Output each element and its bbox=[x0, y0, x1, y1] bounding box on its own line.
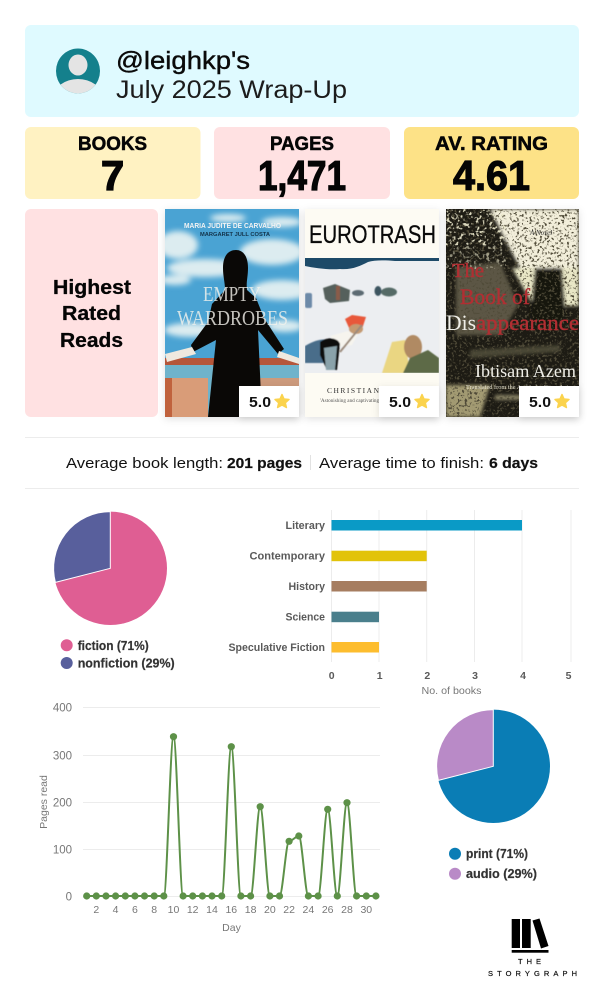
legend: fiction: fiction (71%) bbox=[78, 639, 149, 653]
stat line: average book length: Average book length: bbox=[66, 455, 223, 472]
line chart: pages read per day: 200 bbox=[53, 798, 72, 810]
line chart: pages read per day: 20 bbox=[264, 904, 276, 916]
line chart: pages read per day: 6 bbox=[132, 904, 138, 916]
line chart: pages read per day: 14 bbox=[206, 904, 218, 916]
book cover: The Book of Disappearance bbox=[446, 209, 579, 417]
stat line: average time to finish: 6 days bbox=[489, 455, 538, 472]
rating badge bbox=[519, 386, 579, 417]
logo: The StoryGraph bbox=[488, 918, 577, 978]
book cover: Empty Wardrobes: WARDROBES bbox=[177, 306, 288, 330]
pie chart: fiction vs nonfiction bbox=[54, 512, 175, 670]
line chart: pages read per day: 16 bbox=[225, 904, 237, 916]
bar chart: genres: Contemporary bbox=[250, 550, 326, 562]
icon: user avatar bbox=[56, 48, 100, 94]
rating badge: 5.0 bbox=[249, 394, 271, 411]
line chart: pages read per day: Pages read bbox=[38, 775, 50, 829]
line chart: pages read per day: 30 bbox=[360, 904, 372, 916]
panel: highest rated reads label: Reads bbox=[60, 330, 123, 352]
stat line: average time to finish bbox=[319, 455, 538, 472]
stat card: pages: 1,471 bbox=[258, 152, 346, 199]
line chart: pages read per day: 18 bbox=[245, 904, 257, 916]
bar chart: genres: Literary bbox=[286, 520, 326, 532]
book cover: Empty Wardrobes bbox=[158, 209, 312, 417]
rating badge bbox=[239, 386, 299, 417]
book cover: The Book of Disappearance: A Novel bbox=[529, 229, 552, 237]
pie chart: print vs audio bbox=[437, 710, 550, 881]
book cover: The Book of Disappearance: Book of bbox=[460, 284, 531, 309]
panel: highest rated reads label: Highest bbox=[53, 277, 131, 299]
bar chart: genres: 1 bbox=[377, 670, 383, 682]
stat line: average book length bbox=[66, 455, 302, 472]
rating badge bbox=[379, 386, 439, 417]
logo: The StoryGraph: STORYGRAPH bbox=[488, 969, 577, 978]
stat card: pages bbox=[214, 127, 390, 199]
book cover: The Book of Disappearance: The bbox=[452, 260, 484, 282]
bar chart: genres bbox=[228, 510, 572, 697]
line chart: pages read per day: 28 bbox=[341, 904, 353, 916]
line chart: pages read per day: 4 bbox=[113, 904, 119, 916]
rating badge: 5.0 bbox=[529, 394, 551, 411]
bar chart: genres: History bbox=[288, 581, 326, 593]
panel: highest rated reads label bbox=[25, 209, 158, 417]
line chart: pages read per day: 300 bbox=[53, 750, 72, 762]
figure silhouette bbox=[191, 250, 284, 417]
panel: highest rated reads label: Rated bbox=[62, 303, 121, 325]
book cover: Empty Wardrobes: MARGARET JULL COSTA bbox=[200, 232, 270, 238]
stat card: books: 7 bbox=[101, 152, 124, 199]
stat line: average time to finish: Average time to finish: bbox=[319, 455, 484, 472]
line chart: pages read per day: 0 bbox=[66, 892, 72, 904]
line chart: pages read per day bbox=[38, 702, 380, 934]
book cover: The Book of Disappearance: Dis bbox=[446, 310, 476, 335]
bar chart: genres: 0 bbox=[329, 670, 335, 682]
stat card: average rating: 4.61 bbox=[453, 152, 530, 199]
book cover: The Book of Disappearance: Ibtisam Azem bbox=[475, 361, 576, 381]
line chart: pages read per day: 10 bbox=[168, 904, 179, 916]
stat line: average book length: 201 pages bbox=[227, 455, 302, 472]
stat card: books: BOOKS bbox=[78, 134, 147, 155]
book cover: Eurotrash bbox=[305, 209, 439, 417]
bar chart: genres: No. of books bbox=[422, 685, 482, 697]
legend: print: print (71%) bbox=[466, 847, 528, 861]
line chart: pages read per day: 400 bbox=[53, 702, 72, 714]
header panel bbox=[25, 25, 579, 117]
book cover: Eurotrash: CHRISTIAN bbox=[327, 386, 380, 395]
line chart: pages read per day: Day bbox=[222, 922, 242, 934]
heading: username: @leighkp's bbox=[116, 47, 250, 75]
stat card: books bbox=[25, 127, 200, 199]
line chart: pages read per day: 24 bbox=[303, 904, 314, 916]
stat card: average rating bbox=[404, 127, 579, 199]
logo: The StoryGraph: THE bbox=[518, 957, 541, 966]
line chart: pages read per day: 8 bbox=[151, 904, 157, 916]
stat card: average rating: AV. RATING bbox=[435, 134, 548, 155]
book cover: Empty Wardrobes: EMPTY bbox=[203, 282, 261, 306]
line chart: pages read per day: 2 bbox=[93, 904, 99, 916]
heading: period: July 2025 Wrap-Up bbox=[116, 76, 347, 104]
line chart: pages read per day: 22 bbox=[283, 904, 295, 916]
legend: audio: audio (29%) bbox=[466, 867, 537, 881]
bar chart: genres: 5 bbox=[566, 670, 572, 682]
line chart: pages read per day: 12 bbox=[187, 904, 199, 916]
bar chart: genres: 3 bbox=[472, 670, 478, 682]
stat card: pages: PAGES bbox=[270, 134, 334, 155]
book cover: The Book of Disappearance: Translated from the Arabic by Sinan Antoon bbox=[466, 384, 579, 391]
legend: nonfiction: nonfiction (29%) bbox=[78, 656, 175, 670]
book cover: Eurotrash: EUROTRASH bbox=[309, 221, 436, 249]
book cover: The Book of Disappearance: appearance bbox=[476, 310, 579, 335]
line chart: pages read per day: 100 bbox=[53, 844, 72, 856]
book cover: Eurotrash: 'Astonishing and captivating' bbox=[320, 399, 380, 404]
line chart: pages read per day: 26 bbox=[322, 904, 334, 916]
bar chart: genres: 2 bbox=[424, 670, 430, 682]
bar chart: genres: 4 bbox=[520, 670, 526, 682]
rating badge: 5.0 bbox=[389, 394, 411, 411]
bar chart: genres: Science bbox=[286, 612, 325, 624]
bar chart: genres: Speculative Fiction bbox=[228, 642, 325, 654]
book cover: Empty Wardrobes: MARIA JUDITE DE CARVALHO bbox=[184, 223, 282, 230]
